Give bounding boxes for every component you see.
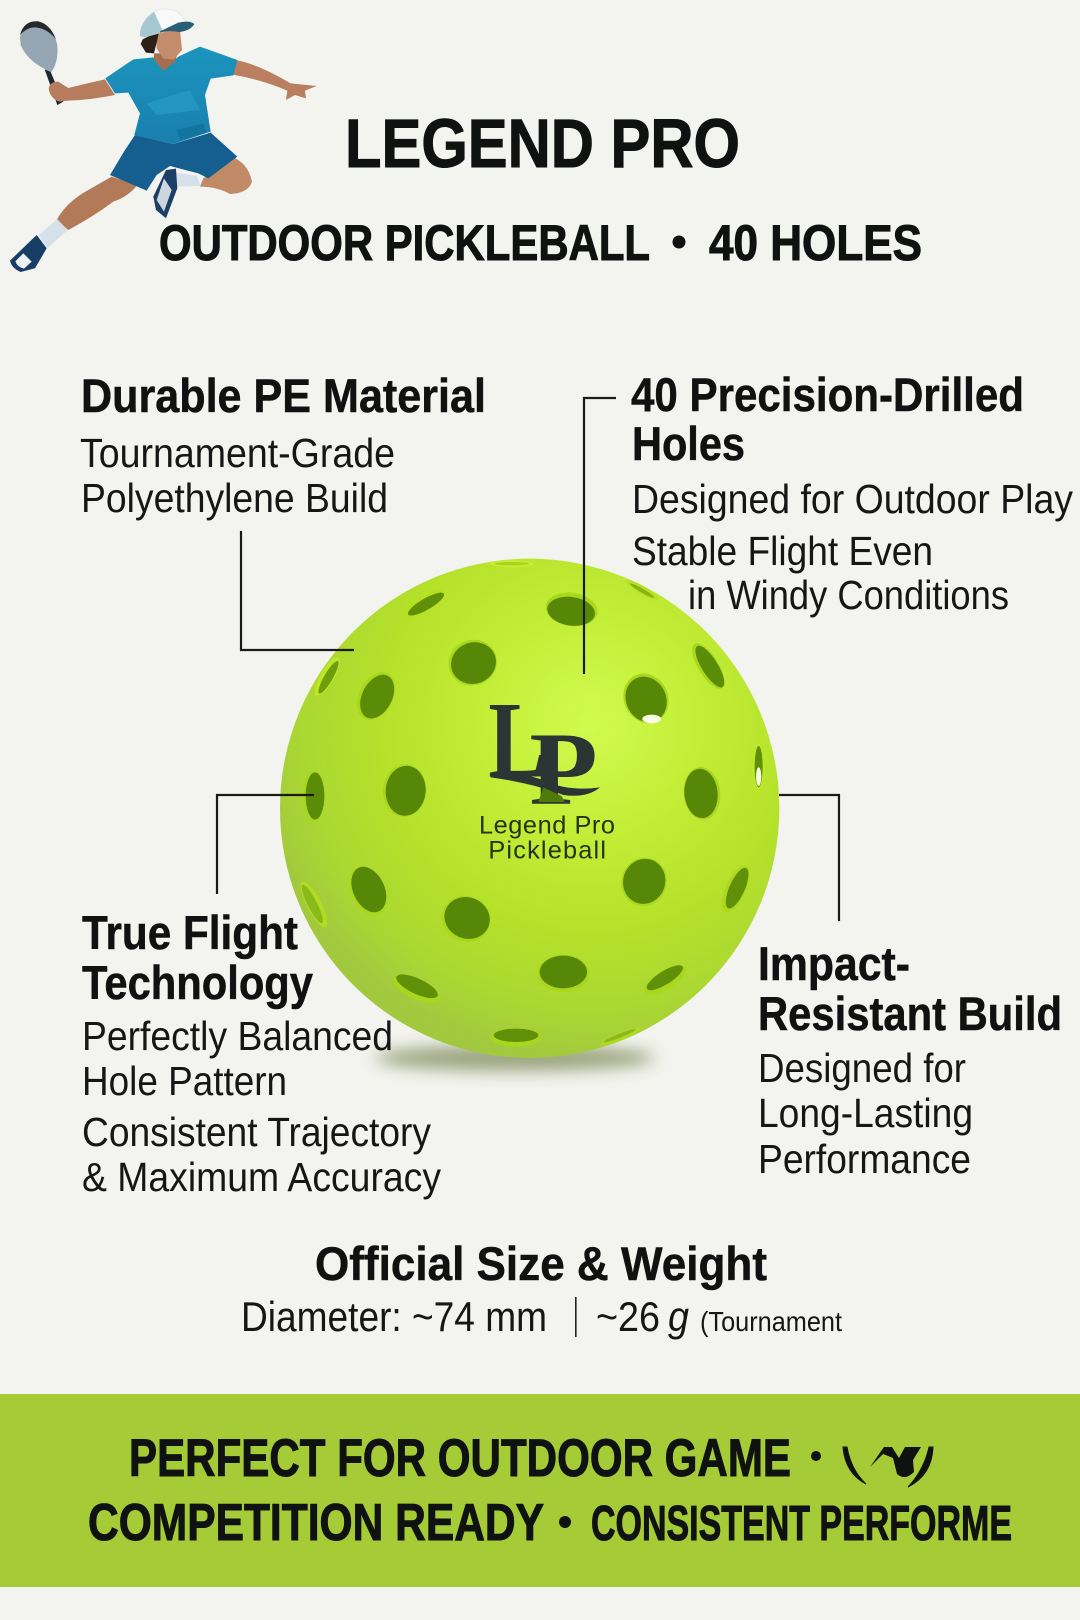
logo text [479,811,615,865]
callout: 40 Precision-Drilled Holes [631,368,1073,618]
official size and weight: Official Size & Weight [315,1237,767,1290]
official size and weight: Diameter: ~74 mm [241,1293,547,1340]
holes [296,560,765,1049]
callout: 40 Precision-Drilled Holes: Stable Flight Even [632,528,933,574]
LP logo [488,680,600,826]
bottom banner [0,1394,1080,1587]
banner line two [88,1494,1012,1552]
right arm [233,60,317,100]
leader line: PE material [241,531,354,650]
official size and weight: g [668,1293,689,1340]
shorts [110,133,237,191]
callout: 40 Precision-Drilled Holes: 40 Precision-Drilled [631,368,1024,421]
banner line one: PERFECT FOR OUTDOOR GAME [129,1429,791,1488]
callout: Impact-Resistant Build: Impact- [758,937,910,990]
callout: Durable PE Material: Tournament-Grade [80,430,395,476]
callout: True Flight Technology: Perfectly Balanced [82,1013,393,1059]
callout: Durable PE Material: Polyethylene Build [81,475,388,521]
tucked sock [168,172,201,187]
callout: True Flight Technology: Technology [82,956,313,1009]
callout: Impact-Resistant Build: Performance [758,1136,971,1182]
callout: True Flight Technology: Consistent Trajectory [82,1109,431,1155]
left shoe [10,235,47,272]
title: LEGEND PRO [345,105,740,182]
callout: 40 Precision-Drilled Holes: in Windy Conditions [688,572,1009,618]
callout: Durable PE Material [80,369,486,521]
leader line: drilled holes [584,398,616,674]
callout: Impact-Resistant Build: Long-Lasting [758,1090,973,1136]
callout: Impact-Resistant Build [758,937,1062,1182]
official size and weight: ~26 [596,1293,660,1340]
callout: True Flight Technology: Hole Pattern [82,1058,287,1104]
left leg [57,177,137,230]
t-shirt [105,47,237,144]
banner line two: COMPETITION READY [88,1494,544,1552]
illustration: pickleball player jumping [10,9,317,272]
logo text: Pickleball [488,837,606,865]
icon: garbled emblem [843,1447,933,1487]
official size and weight: (Tournament [700,1306,842,1337]
right thigh [200,157,252,194]
paddle [20,21,63,105]
tucked shoe [153,169,177,218]
LP logo: P [529,712,598,826]
callout: True Flight Technology: True Flight [82,906,298,959]
ball shadow [375,1045,655,1071]
left arm [49,79,115,102]
pickleball with holes and logo [280,559,779,1058]
callout: True Flight Technology: & Maximum Accuracy [82,1154,441,1200]
left sock [39,219,68,248]
callout: True Flight Technology [82,906,441,1200]
callout: Durable PE Material: Durable PE Material [81,369,486,422]
leader line: impact resistant [779,795,839,921]
head [141,30,182,71]
subtitle: 40 HOLES [709,215,922,271]
official size and weight [241,1237,842,1340]
cap [140,9,194,37]
LP logo: L [488,680,547,801]
subtitle: OUTDOOR PICKLEBALL [159,215,650,271]
callout: Impact-Resistant Build: Designed for [758,1045,966,1091]
leader line: true flight [217,795,314,894]
logo text: Legend Pro [479,811,615,839]
callout: 40 Precision-Drilled Holes: Holes [632,417,745,470]
